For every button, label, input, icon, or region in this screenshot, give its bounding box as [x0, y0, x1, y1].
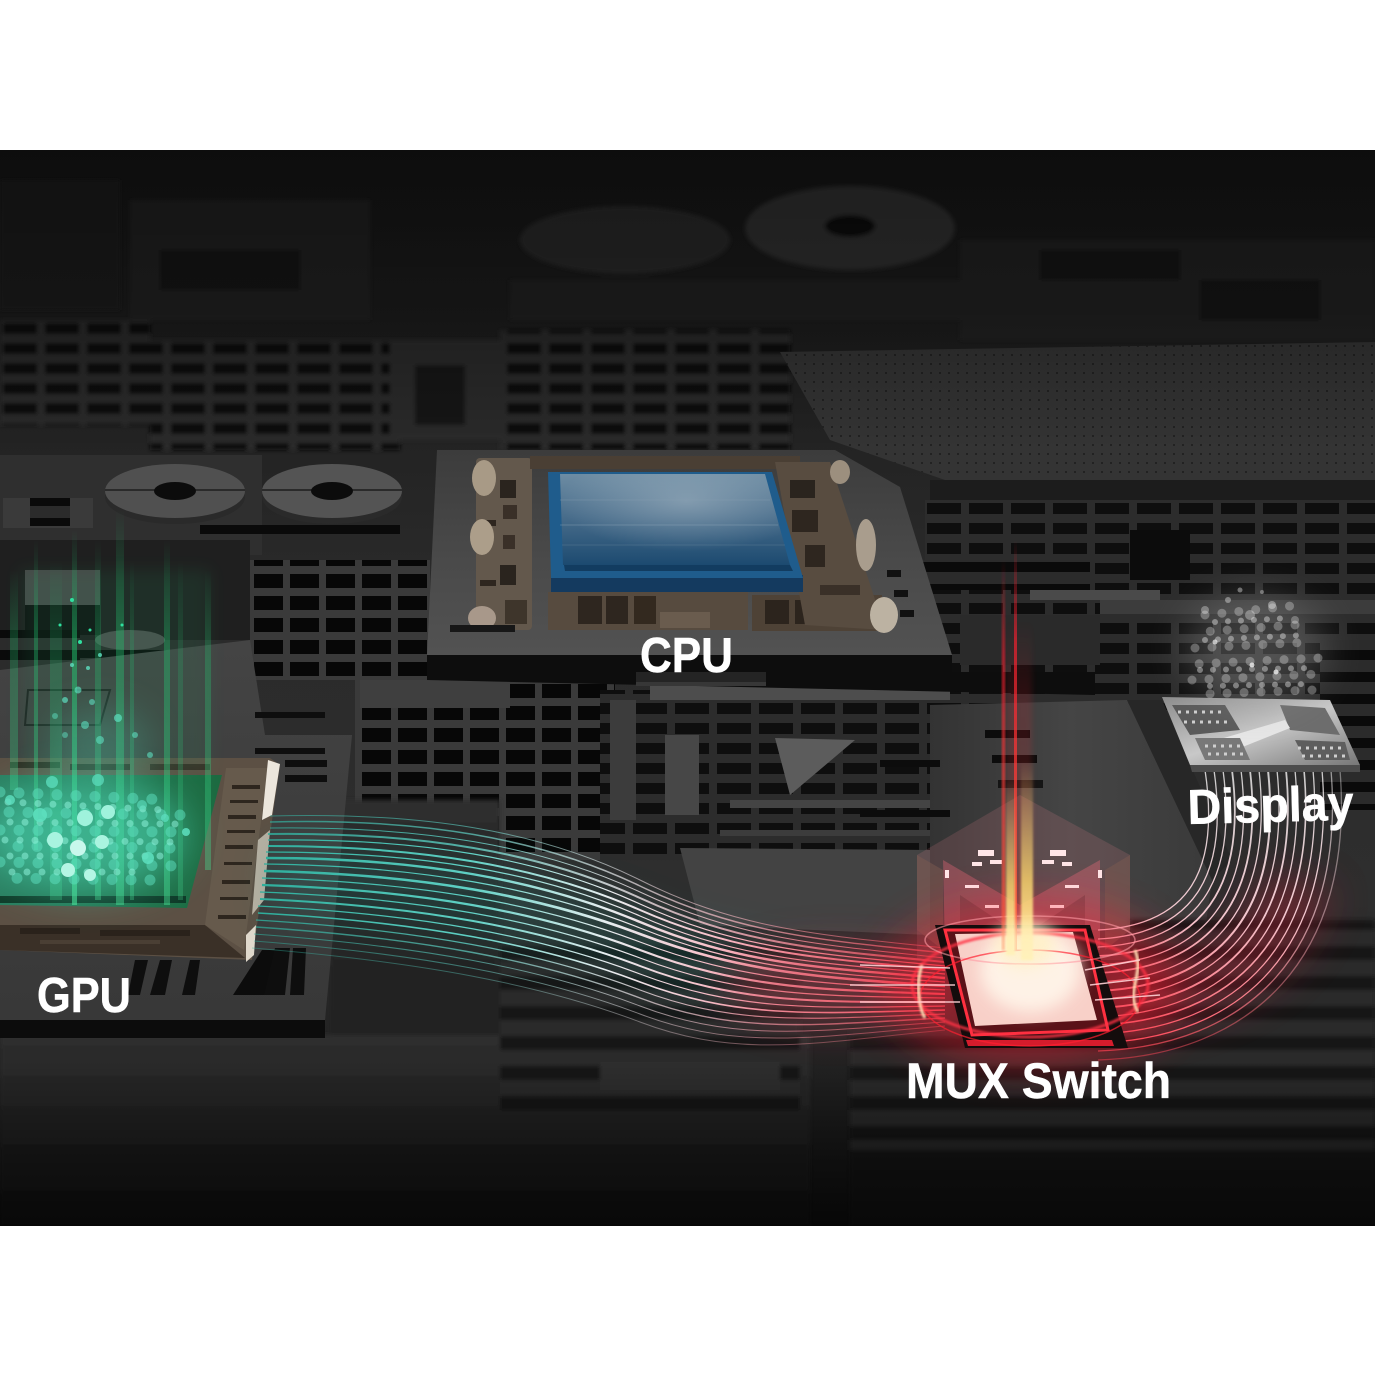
disc components: [0, 455, 402, 534]
label: Display: Display: [1187, 777, 1354, 835]
upper board structures: [2, 186, 954, 452]
CPU board plate: [427, 450, 1095, 695]
GPU plate: [0, 640, 352, 1038]
CPU surrounding copper components: [450, 456, 914, 633]
GPU chip module: [0, 758, 280, 962]
GPU sparkle particles: [0, 598, 190, 890]
label: CPU: CPU: [640, 629, 733, 683]
data stream from MUX switch to display: [1098, 770, 1341, 1060]
red glow along display stream: [1110, 880, 1300, 1000]
label: GPU: GPU: [37, 969, 131, 1023]
stream underglow: [270, 880, 945, 985]
large dotted plate, upper right: [780, 342, 1375, 810]
lower board rows: [2, 798, 1375, 1150]
MUX switch chip: [880, 900, 1180, 1070]
display chip: [1162, 697, 1360, 772]
top dim overlay: [0, 150, 1375, 371]
dark circuit board illustration: [0, 150, 1375, 1226]
beam above MUX switch: [995, 540, 1055, 967]
bottom dim overlay: [0, 1112, 1375, 1226]
streams entering MUX switch: [850, 960, 1160, 1002]
stream glow near MUX: [720, 945, 960, 1025]
CPU blue chip: [548, 472, 803, 592]
board base: [0, 150, 1375, 1226]
mid plate under MUX switch: [680, 700, 1232, 935]
central component grid: [250, 560, 960, 860]
MUX chip hologram cube: [917, 795, 1130, 960]
label: MUX Switch: MUX Switch: [906, 1053, 1171, 1109]
GPU area background components: [0, 540, 250, 670]
data stream from GPU to MUX switch: [252, 815, 945, 1045]
display sparkle particles: [1185, 588, 1325, 705]
green beams from GPU: [10, 510, 211, 905]
